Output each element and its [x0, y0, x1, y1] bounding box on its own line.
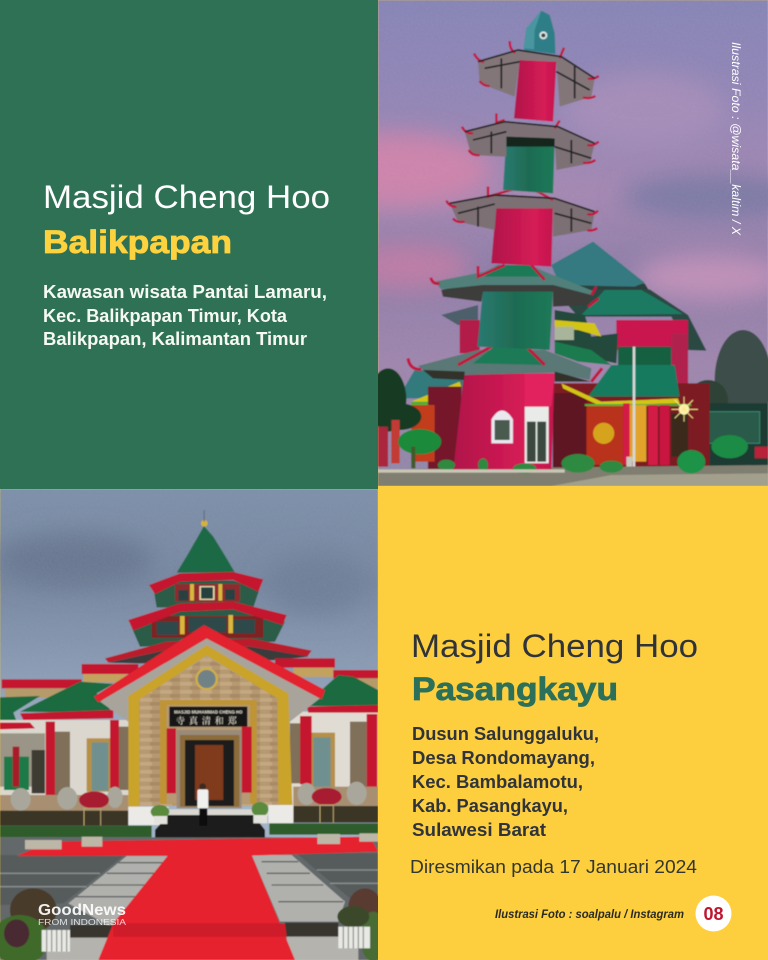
logo: GoodNews from Indonesia: GoodNews: [38, 902, 126, 919]
text block: location Pasangkayu: Sulawesi Barat: [412, 819, 546, 840]
window and door: [491, 410, 513, 443]
tree left: [370, 368, 441, 468]
entrance sign: [169, 707, 247, 727]
text block: location Pasangkayu: Desa Rondomayang,: [412, 747, 595, 768]
side wings: [0, 658, 378, 812]
page number badge: 08: [703, 904, 724, 924]
photo: Masjid Cheng Hoo Balikpapan pagoda tower: [378, 0, 768, 486]
stone pots on carpet edge: [25, 833, 378, 849]
floor and carpet: [0, 837, 378, 960]
text: inauguration date: Diresmikan pada 17 Januari 2024: [410, 856, 697, 877]
text block: location Balikpapan: Kawasan wisata Pantai Lamaru,: [43, 281, 327, 302]
person: [197, 783, 208, 826]
terrace and jars: [0, 782, 378, 826]
tower tier 4: [477, 290, 553, 350]
text block: location Pasangkayu: Kab. Pasangkayu,: [412, 795, 568, 816]
background: yellow panel: [378, 486, 768, 960]
panel: green heading block: [0, 0, 378, 489]
ground: [378, 465, 768, 486]
heading: Masjid Cheng Hoo Balikpapan: Balikpapan: [43, 224, 232, 260]
main hall roofs and walls: [398, 242, 710, 475]
text block: location Balikpapan: [43, 281, 327, 349]
gable entrance: [94, 625, 325, 825]
tower tier 1: [514, 60, 556, 122]
photo: Masjid Cheng Hoo Pasangkayu front view: [0, 489, 387, 960]
tower tier 2: [502, 146, 556, 194]
planters at door: [151, 802, 268, 824]
photo credit: bottom: Ilustrasi Foto : soalpalu / Instagram: [495, 907, 684, 921]
logo: GoodNews from Indonesia: FROM INDONESIA: [38, 918, 127, 927]
heading: Masjid Cheng Hoo Balikpapan: Masjid Cheng Hoo: [43, 179, 330, 215]
hedges: [0, 823, 378, 837]
heading: Masjid Cheng Hoo Balikpapan: [43, 179, 330, 260]
page number badge: [696, 896, 732, 932]
heading: Masjid Cheng Hoo Pasangkayu: Pasangkayu: [412, 671, 618, 707]
roof tiers: [105, 510, 312, 663]
text block: location Balikpapan: Balikpapan, Kalimantan Timur: [43, 328, 307, 349]
foreground plants and fences: [0, 888, 387, 960]
tower: [408, 11, 602, 472]
tower tier 3: [491, 203, 553, 267]
flower stands: [78, 788, 342, 826]
logo: GoodNews from Indonesia: [38, 902, 127, 927]
text block: location Pasangkayu: Dusun Salunggaluku,: [412, 723, 599, 744]
tower tier 5 base: [453, 373, 555, 472]
foreground shrubs: [438, 450, 705, 473]
entrance sign: MASJID MUHAMMAD CHENG HO: [174, 709, 243, 714]
stairs: [155, 815, 265, 838]
entrance sign: 寺真清和郑: [176, 714, 241, 727]
text block: location Pasangkayu: [412, 723, 599, 840]
text block: location Pasangkayu: Kec. Bambalamotu,: [412, 771, 583, 792]
background trees right: [696, 330, 768, 466]
tower spire: [524, 11, 555, 54]
photo credit: vertical: Ilustrasi Foto : @wisata__kaltim / X: [729, 42, 743, 236]
text block: location Balikpapan: Kec. Balikpapan Timur, Kota: [43, 305, 288, 326]
heading: Masjid Cheng Hoo Pasangkayu: [411, 628, 698, 707]
heading: Masjid Cheng Hoo Pasangkayu: Masjid Cheng Hoo: [411, 628, 698, 664]
